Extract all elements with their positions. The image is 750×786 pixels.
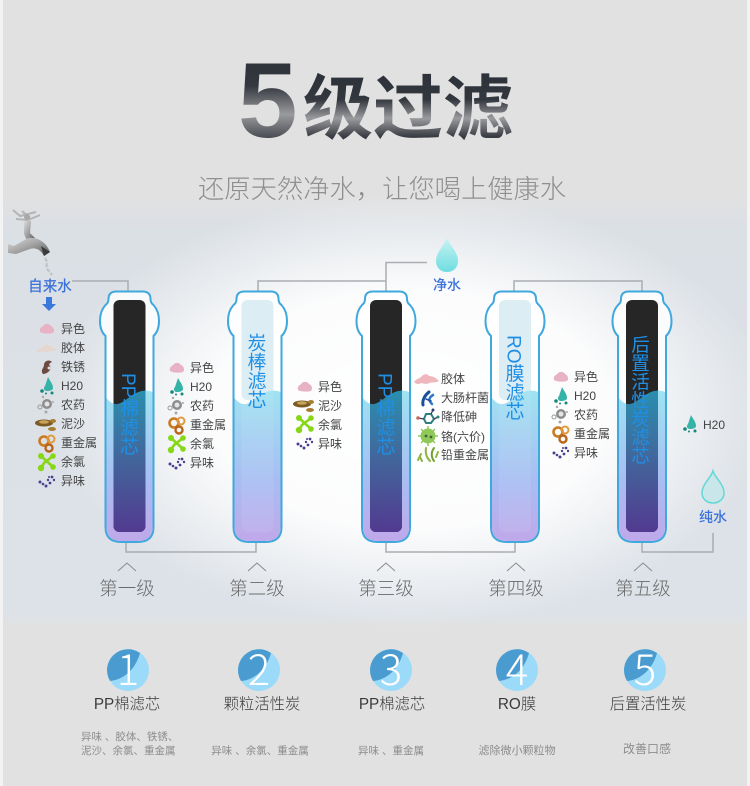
summary 2: 2	[248, 637, 270, 698]
summary 3	[358, 637, 425, 757]
icon: pure water drop	[702, 471, 724, 503]
stage labels: 第五级	[615, 578, 671, 599]
contaminant list: stage 1: 余氯	[61, 454, 85, 469]
contaminant list: stage 1: 异味	[61, 474, 85, 488]
label: tap water: 自来水	[28, 278, 72, 295]
output: H20	[683, 415, 725, 432]
summary 5: 5	[634, 637, 656, 698]
summary 3: 3	[380, 637, 402, 698]
filter 3: PP cotton: PP棉滤芯	[374, 373, 395, 455]
contaminant list: stage 3: 异色	[318, 380, 342, 394]
stage labels: 第三级	[358, 578, 414, 599]
summary 4: RO膜	[498, 696, 536, 713]
contaminant list: stage 2: 农药	[190, 399, 214, 413]
summary 1: 泥沙、余氯、重金属	[81, 744, 176, 757]
contaminant list: stage 2: 重金属	[190, 417, 226, 432]
output: H20: H20	[703, 418, 725, 432]
filter 2: carbon rod	[228, 292, 287, 542]
title	[238, 40, 513, 160]
stage labels: 第四级	[488, 578, 544, 599]
contaminant list: stage 5: 农药	[574, 408, 598, 422]
contaminant list: stage 5: 异色	[574, 370, 598, 384]
contaminant list: stage 4: 降低砷	[441, 410, 477, 424]
contaminant list: stage 5: 异味	[574, 446, 598, 460]
contaminant list: stage 2: 异色	[190, 361, 214, 375]
filter 4: RO membrane	[486, 292, 544, 542]
contaminant list: stage 1: 异色	[61, 322, 85, 336]
connector lines between filters	[72, 262, 713, 552]
summary 4: 4	[506, 637, 528, 698]
label: purified water: 净水	[433, 277, 461, 293]
summary 2: 颗粒活性炭	[224, 696, 300, 713]
subtitle: 还原天然净水，让您喝上健康水	[198, 174, 566, 204]
contaminant list: stage 4: 铬(六价)	[441, 429, 485, 444]
contaminant list: stage 2: 异味	[190, 456, 214, 470]
contaminant list: stage 2: H20	[190, 380, 212, 394]
title: 5	[238, 40, 298, 160]
contaminant list: stage 3: 泥沙	[318, 399, 342, 413]
summary 1: 1	[117, 637, 139, 698]
contaminant list: stage 4: 铅重金属	[441, 447, 489, 462]
contaminant list: stage 1: 泥沙	[61, 417, 85, 431]
filter 5: post activated carbon	[612, 292, 672, 542]
contaminant list: stage 2	[168, 361, 226, 470]
summary 1: PP棉滤芯	[94, 696, 160, 713]
summary 2: 异味 、余氯、重金属	[211, 744, 309, 757]
summary 1: 异味 、胶体、铁锈、	[81, 730, 178, 743]
contaminant list: stage 1: 胶体	[61, 340, 85, 355]
summary 2	[211, 637, 309, 757]
contaminant list: stage 1: 铁锈	[61, 360, 85, 374]
contaminant list: stage 5: 重金属	[574, 426, 610, 441]
filter 2: carbon rod: 炭棒滤芯	[244, 333, 266, 409]
contaminant list: stage 4: 胶体	[441, 371, 465, 386]
arrow: down	[42, 297, 56, 311]
summary 3: 异味 、重金属	[358, 744, 424, 757]
icon: purified water drop	[436, 238, 458, 272]
summary 1	[81, 637, 178, 757]
filter 3: PP cotton	[356, 292, 416, 542]
stage labels	[99, 563, 671, 599]
contaminant list: stage 1	[35, 322, 97, 488]
filter 5: post activated carbon: 后置活性炭滤芯	[630, 335, 650, 464]
contaminant list: stage 4	[414, 371, 489, 462]
label: pure water: 纯水	[699, 509, 727, 525]
summary 5: 后置活性炭	[610, 696, 686, 713]
filter 1: PP cotton: PP棉滤芯	[117, 373, 138, 455]
title: 级过滤	[303, 70, 513, 148]
summary 4: 滤除微小颗粒物	[478, 743, 556, 757]
summary 5	[610, 637, 686, 756]
contaminant list: stage 4: 大肠杆菌	[441, 391, 489, 405]
summary 5: 改善口感	[623, 741, 671, 756]
contaminant list: stage 1: H20	[61, 379, 83, 393]
stage labels: 第二级	[229, 578, 285, 599]
stage labels: 第一级	[99, 578, 155, 599]
summary 3: PP棉滤芯	[359, 696, 425, 713]
contaminant list: stage 3: 余氯	[318, 417, 342, 432]
contaminant list: stage 1: 农药	[61, 398, 85, 412]
contaminant list: stage 2: 余氯	[190, 436, 214, 451]
contaminant list: stage 5	[552, 370, 610, 460]
contaminant list: stage 5: H20	[574, 389, 596, 403]
icon: faucet	[8, 210, 52, 275]
filter 1: PP cotton	[100, 292, 159, 542]
contaminant list: stage 3: 异味	[318, 437, 342, 451]
filter 4: RO membrane: RO膜滤芯	[502, 335, 524, 420]
summary 4	[478, 637, 556, 757]
contaminant list: stage 3	[293, 380, 342, 451]
contaminant list: stage 1: 重金属	[61, 435, 97, 450]
